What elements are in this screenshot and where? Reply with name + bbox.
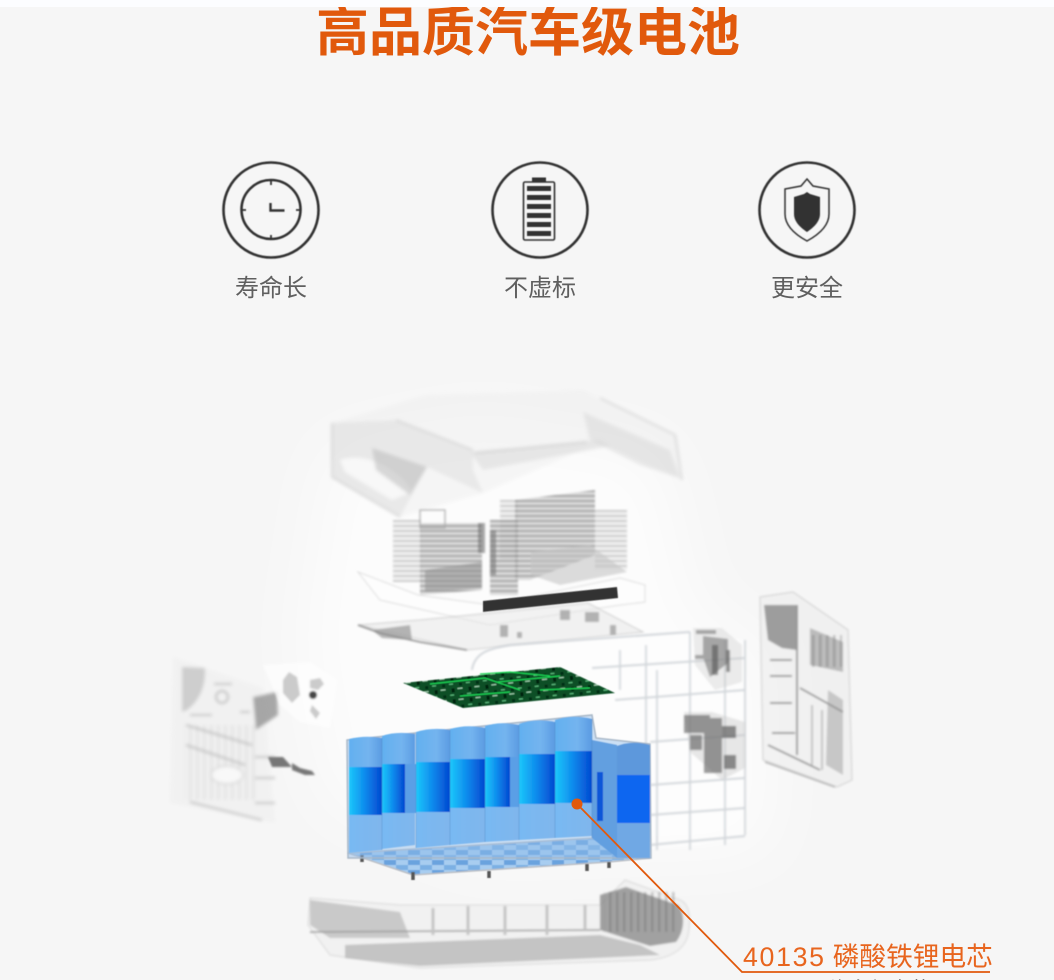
- cell 3: [416, 729, 450, 848]
- callout: leader line and cell label: 40135 磷酸铁锂电芯: [743, 942, 993, 972]
- cell 5: [485, 723, 519, 842]
- cell 1: [349, 737, 382, 853]
- PCB board: [403, 667, 615, 708]
- cell 2: [382, 733, 416, 849]
- heatsink assembly: [358, 490, 645, 625]
- rear cells: [592, 740, 650, 858]
- frame side components: [684, 628, 745, 780]
- icon: clock, long life: [224, 162, 318, 258]
- right side panel ghost: [760, 592, 852, 787]
- middle board ghost: [358, 603, 643, 650]
- main frame ghost: [472, 632, 746, 852]
- bottom shell ghost: [308, 880, 690, 968]
- dark connector bar: [483, 587, 618, 612]
- icon: battery, honest capacity: [492, 162, 588, 258]
- icon: shield, safer: [760, 162, 854, 258]
- cell 4: [450, 726, 485, 845]
- battery tray: [348, 838, 650, 880]
- title: 高品质汽车级电池: [316, 4, 740, 62]
- top cover ghost: [332, 390, 682, 517]
- left panel connector parts: [263, 662, 337, 775]
- label: safer: 更安全: [771, 275, 843, 302]
- battery pack: cells: [347, 715, 651, 858]
- label: honest capacity: 不虚标: [504, 275, 576, 302]
- cell 7: [555, 717, 592, 838]
- label: long life: 寿命长: [235, 275, 307, 302]
- callout: leader line and cell label: [572, 798, 993, 972]
- cell 6: [519, 720, 555, 840]
- left side panel ghost: [170, 657, 278, 823]
